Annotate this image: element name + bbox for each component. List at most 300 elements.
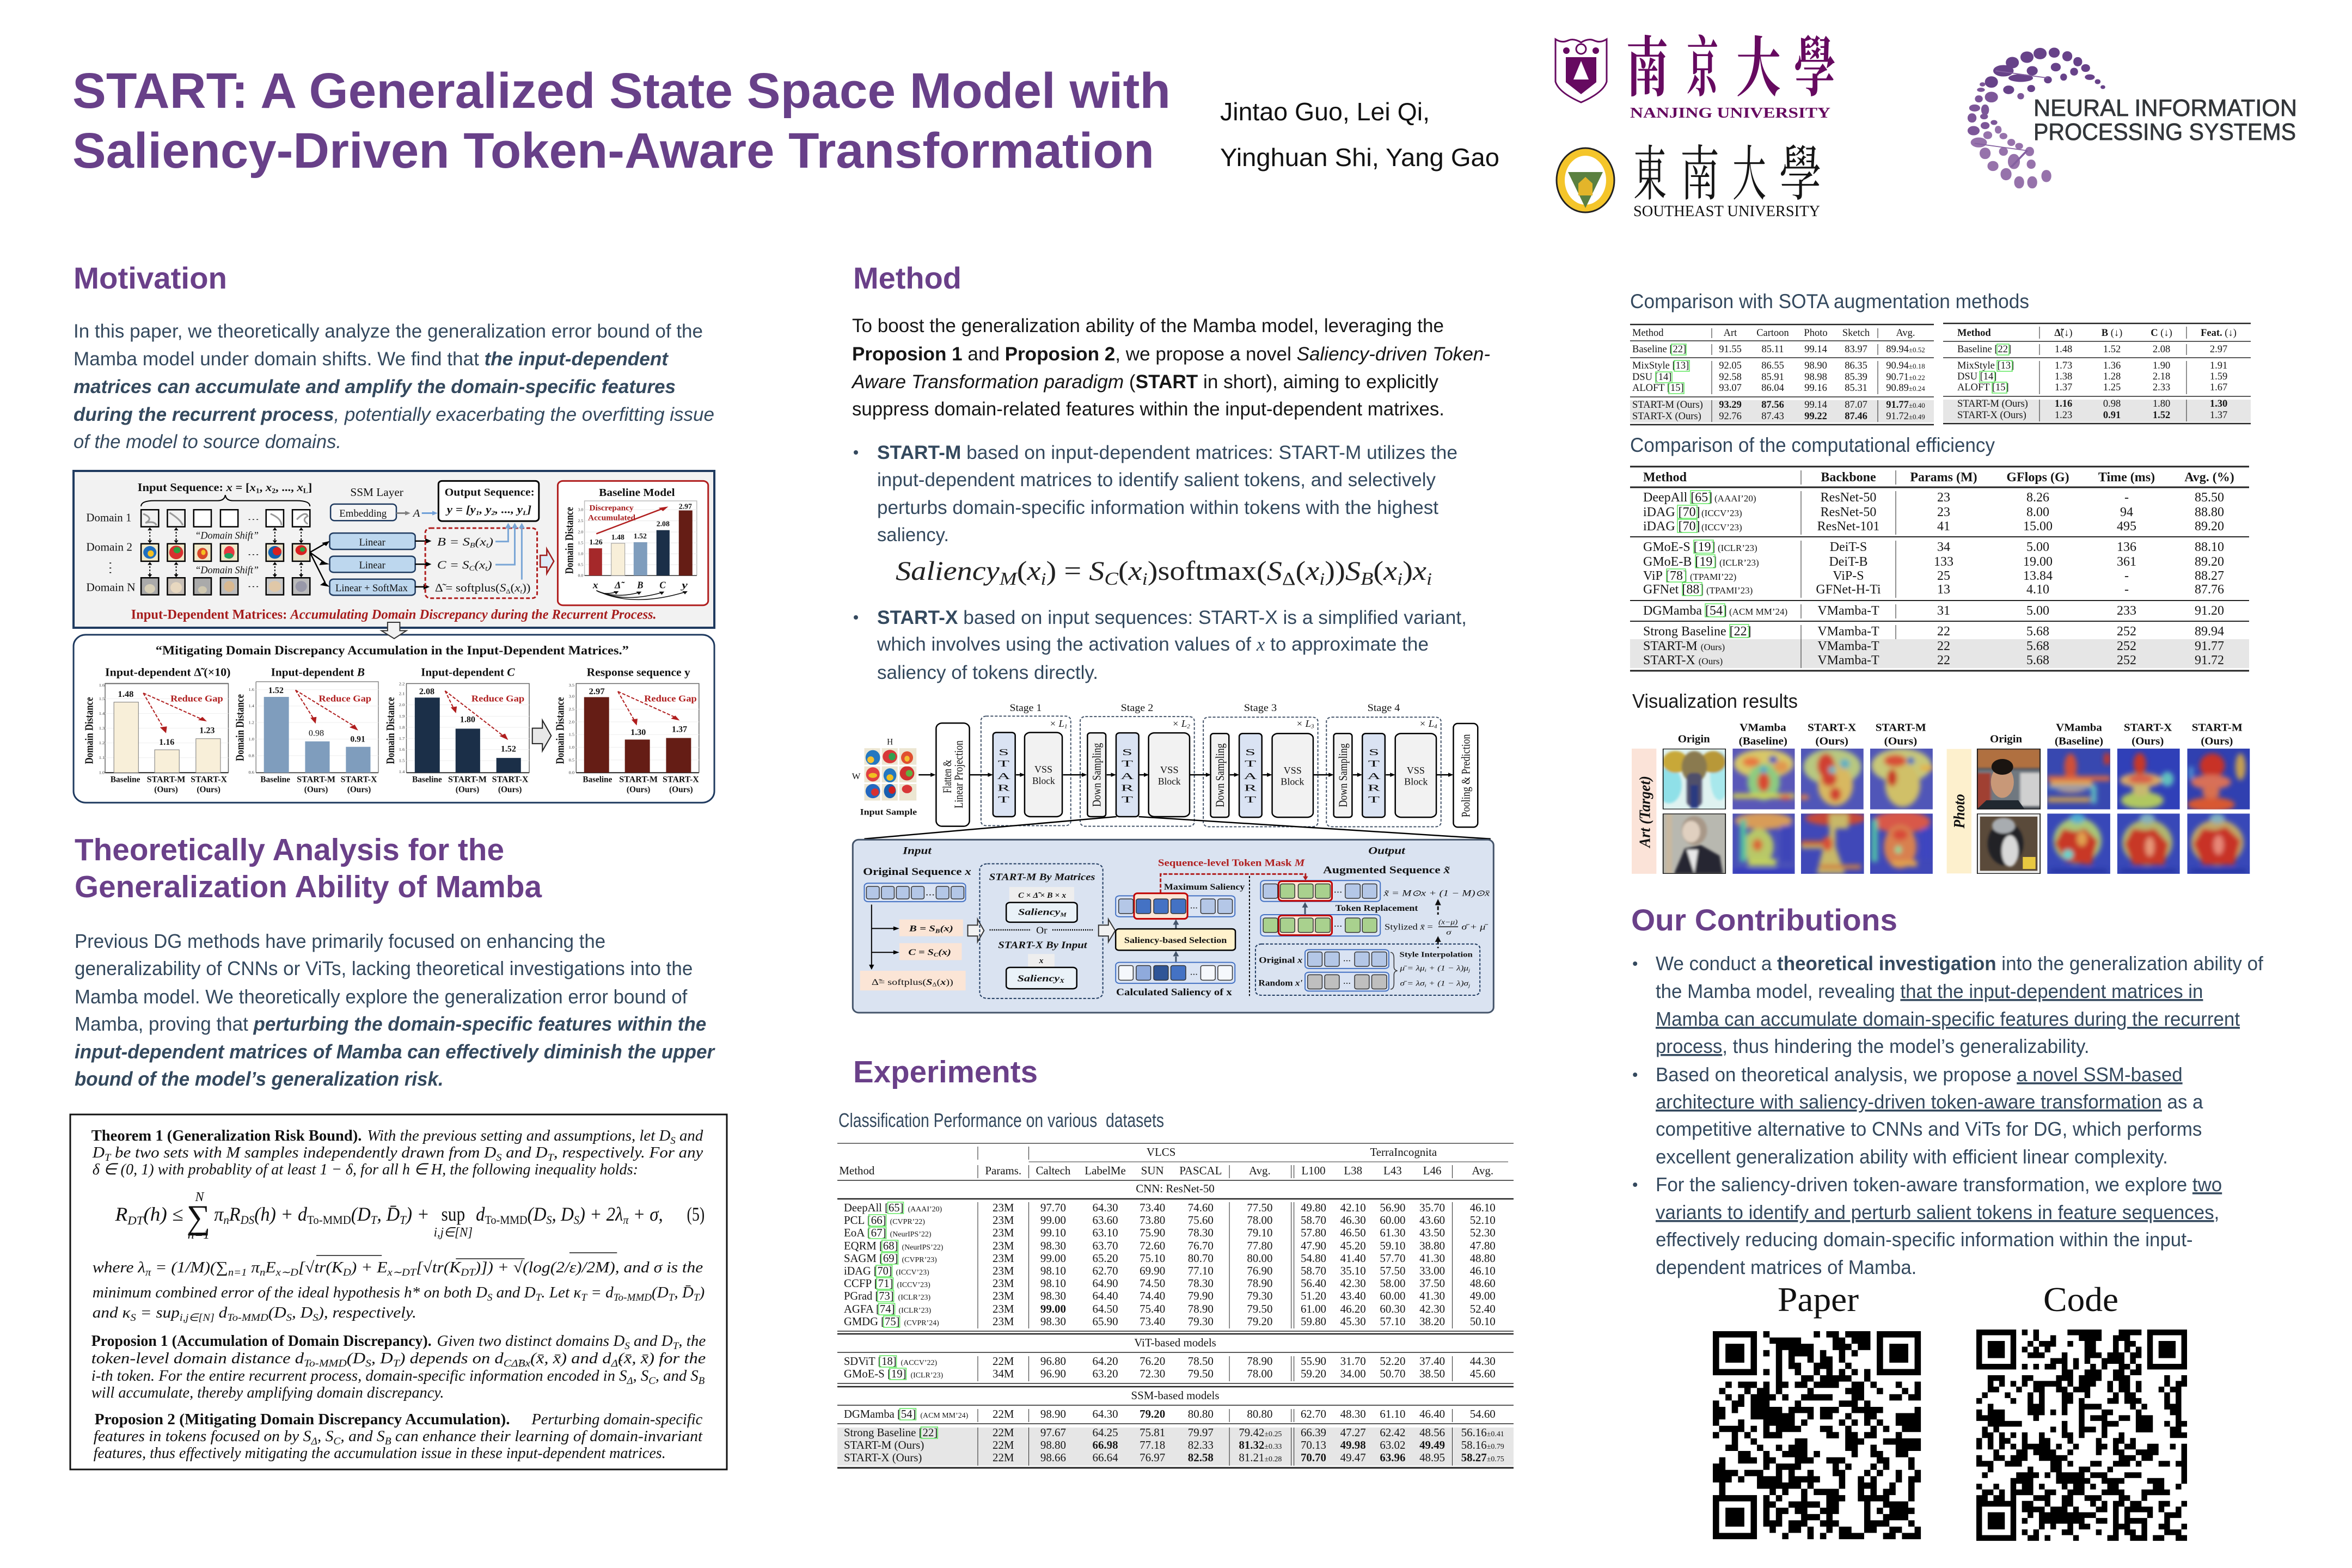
- table: SOTA comparison accuracy: 85.31: [1845, 383, 1867, 394]
- chart: response sequence y: 1.37: [672, 725, 687, 734]
- theorem 1: T: [548, 1152, 554, 1163]
- table: SOTA comparison distance: Baseline [22]: [1957, 344, 2011, 355]
- text block: theoretical analysis body: input-dependent matrices of Mamba can effectively diminish the upper: [75, 1040, 715, 1063]
- equation 5: [114, 1190, 705, 1242]
- logo: Southeast University: 大: [1732, 142, 1766, 208]
- formula: saliency M: C: [1104, 569, 1118, 589]
- chart: response sequence y: Baseline: [583, 775, 612, 785]
- style interpolation box: σ̄ = λσ: [1400, 979, 1440, 988]
- authors: Yinghuan Shi, Yang Gao: [1220, 143, 1499, 171]
- table: SOTA comparison accuracy: 90.89±0.24: [1886, 383, 1925, 394]
- method column: GMDG [75]: [844, 1315, 900, 1328]
- theorem 1: be two sets with M samples independently drawn from D: [111, 1144, 496, 1161]
- baseline model chart: 1.26: [589, 538, 603, 546]
- table: SOTA comparison accuracy: 98.98: [1804, 372, 1827, 383]
- table: SOTA comparison accuracy: 99.14: [1804, 344, 1827, 355]
- chart: input-dependent B: 1.4: [248, 704, 254, 708]
- input sample image: H: [887, 737, 893, 746]
- data rows: 79.30: [1188, 1315, 1214, 1328]
- stages pipeline: R: [1121, 783, 1134, 793]
- chart: response sequence y: Reduce Gap: [644, 693, 697, 703]
- table: SOTA comparison accuracy: 87.56: [1761, 400, 1784, 411]
- chart: input-dependent C: 2.08: [419, 687, 434, 696]
- method column: Strong Baseline [22]: [844, 1426, 938, 1439]
- table: computational efficiency: 361: [2117, 555, 2136, 569]
- data rows: 46.30: [1340, 1214, 1366, 1227]
- table: computational efficiency: 4.10: [2026, 583, 2049, 597]
- panel: input-dependent matrices: Output Sequence:: [445, 486, 535, 498]
- proposition 1: , S: [633, 1367, 648, 1385]
- text block: method intro: suppress domain-related features within the input-dependent matrixes.: [852, 399, 1444, 420]
- panel: START module detail: Maximum Saliency: [1164, 883, 1245, 892]
- VSS blocks: [1025, 732, 1436, 817]
- where clause: . Let κ: [541, 1284, 581, 1301]
- stages pipeline: S: [1369, 747, 1379, 757]
- text block: contributions: the Mamba model, revealing that the input-dependent matrices in: [1656, 981, 2203, 1002]
- data rows: 58.70: [1301, 1214, 1326, 1227]
- data rows: 78.90: [1188, 1302, 1214, 1315]
- panel: input-dependent matrices: y = [y: [447, 504, 495, 516]
- table: classification performance: L100: [1301, 1164, 1326, 1177]
- text block: theoretical analysis body: bound of the model’s generalization risk.: [75, 1068, 444, 1090]
- table: SOTA comparison distance: 1.23: [2055, 410, 2072, 421]
- proposition 1: C: [648, 1375, 656, 1387]
- data rows: 48.60: [1470, 1277, 1496, 1290]
- panel: START module detail: C = S: [908, 947, 950, 957]
- logo: NeurIPS: [1968, 48, 2297, 188]
- proposition 1: (x̄, x̄) and d: [530, 1350, 611, 1367]
- data rows: 23M: [993, 1226, 1014, 1239]
- calculated saliency sequence: [1116, 963, 1235, 997]
- data rows: 76.70: [1188, 1239, 1214, 1252]
- table: computational efficiency: 22: [1937, 639, 1950, 653]
- table: SOTA comparison distance: B: [2102, 328, 2108, 339]
- chart: input-dependent delta: START-X: [191, 775, 227, 785]
- table: SOTA comparison accuracy: 85.11: [1762, 344, 1784, 355]
- method column: START-M (Ours): [844, 1438, 924, 1451]
- proposition 2: Proposion 2 (Mitigating Domain Discrepancy Accumulation).: [95, 1411, 510, 1428]
- baseline model chart: 2.0: [578, 530, 583, 535]
- equation 5: n: [223, 1213, 229, 1227]
- heading: theoretical analysis: Theoretically Analysis for the: [75, 832, 504, 867]
- table: computational efficiency: Method: [1643, 470, 1687, 485]
- block: pooling and prediction: [1453, 724, 1478, 827]
- data rows: 64.30: [1093, 1407, 1118, 1420]
- data rows: 64.90: [1093, 1277, 1118, 1290]
- method column: DeepAll [65]: [844, 1201, 904, 1214]
- START-M and START-X options: M: [1059, 912, 1067, 918]
- data rows: 78.00: [1247, 1367, 1272, 1380]
- baseline model chart: 1.0: [578, 552, 583, 556]
- chart: input-dependent delta: 1.4: [99, 712, 105, 716]
- data rows: 65.20: [1093, 1252, 1118, 1265]
- table: computational efficiency: 91.20: [2195, 604, 2224, 618]
- where clause: = sup: [136, 1304, 180, 1321]
- saliency selection box: [1116, 929, 1235, 950]
- panel: input-dependent matrices: L: [303, 487, 308, 495]
- logo: Nanjing University: 學: [1793, 32, 1836, 105]
- theorem 1: and D: [501, 1144, 548, 1161]
- table: classification performance: Method: [839, 1164, 875, 1177]
- chart: response sequence y: 2.0: [569, 720, 574, 724]
- table: SOTA comparison distance: 1.90: [2153, 360, 2170, 371]
- chart: input-dependent B: (Ours): [304, 785, 328, 794]
- table: computational efficiency: VMamba-T: [1817, 639, 1879, 653]
- text block: theoretical analysis body: generalizability of CNNs or ViTs, lacking theoretical investigations into the: [75, 957, 693, 979]
- table: computational efficiency: ViP-S: [1833, 569, 1864, 583]
- proposition 1: ) depends on d: [398, 1350, 504, 1367]
- table: SOTA comparison distance: Δ̃: [2054, 328, 2065, 339]
- formula: saliency M: x: [1026, 555, 1040, 586]
- table: SOTA comparison distance: 1.67: [2210, 382, 2227, 393]
- stages pipeline: 1: [1064, 723, 1067, 730]
- where clause: d: [215, 1304, 228, 1321]
- table: SOTA comparison distance: (↓): [2108, 328, 2122, 339]
- stages pipeline: S: [999, 747, 1009, 757]
- panel: input-dependent matrices: x: [297, 481, 303, 494]
- data rows: 80.00: [1247, 1252, 1272, 1265]
- stages pipeline: Stage 1: [1009, 702, 1042, 713]
- table: computational efficiency: 22: [1937, 653, 1950, 667]
- chart: input-dependent delta: Baseline: [111, 775, 140, 785]
- data rows: 23M: [993, 1302, 1014, 1315]
- heading: Our Contributions: Our Contributions: [1631, 903, 1897, 937]
- heading: visualization results: Visualization results: [1632, 690, 1798, 712]
- panel: input-dependent matrices: (x: [475, 559, 485, 571]
- table: computational efficiency: 85.50: [2195, 491, 2224, 505]
- data rows: 73.40: [1140, 1201, 1165, 1214]
- panel: START module detail: (x): [938, 947, 951, 957]
- data rows: 38.20: [1419, 1315, 1445, 1328]
- equation 5: R: [115, 1203, 127, 1225]
- formula: saliency M: x: [1128, 555, 1142, 586]
- data rows: 23M: [993, 1315, 1014, 1328]
- panel: input-dependent matrices: Domain 2: [86, 541, 132, 553]
- chart: input-dependent C: 2.2: [399, 682, 405, 686]
- text block: method intro: Proposion 1 and Proposion 2, we propose a novel Saliency-driven Token-: [852, 344, 1490, 365]
- panel: START module detail: Sequence-level Token Mask M: [1158, 858, 1305, 868]
- table: computational efficiency: START-M (Ours): [1643, 639, 1725, 653]
- method column: (AAAI’20): [908, 1205, 942, 1214]
- equation 5: To-MMD: [485, 1213, 528, 1227]
- table: SOTA comparison distance: START-M (Ours): [1957, 399, 2028, 409]
- stylized sequence: [1260, 915, 1489, 936]
- panel: START module detail: ...: [926, 889, 935, 897]
- augmented sequence: x̃ = M⊙x + (1 − M)⊙x̄: [1383, 889, 1490, 898]
- equation 5: (h) + d: [254, 1203, 308, 1225]
- stages pipeline: T: [1368, 794, 1380, 805]
- data rows: [993, 1201, 1504, 1464]
- data rows: 82.58: [1188, 1451, 1214, 1464]
- stylized sequence: ...: [1334, 920, 1342, 929]
- style interpolation box: + (1 − λ)σ: [1426, 979, 1469, 988]
- data rows: 23M: [993, 1289, 1014, 1302]
- equation 5: ) + 2λ: [578, 1203, 623, 1225]
- data rows: 46.40: [1419, 1407, 1445, 1420]
- data rows: 51.20: [1301, 1289, 1326, 1302]
- panel: input-dependent matrices: 2: [491, 509, 495, 516]
- text block: START-X bullet: START-X based on input sequences: START-X is a simplified variant,: [877, 607, 1467, 628]
- heatmap: elephant START-X: [1801, 749, 1864, 810]
- chart: input-dependent C: 1.7: [399, 737, 405, 741]
- table: SOTA comparison accuracy: ALOFT [15]: [1632, 383, 1684, 394]
- table: computational efficiency: DeiT-B: [1829, 555, 1868, 569]
- equation 5: To-MMD: [307, 1213, 351, 1227]
- formula: saliency M: (: [1296, 555, 1306, 586]
- panel: START module detail: Augmented Sequence x̃: [1323, 864, 1450, 876]
- theorem 1: T: [105, 1152, 112, 1163]
- table: computational efficiency: (ICLR’23): [1719, 558, 1759, 568]
- title: START: A Generalized State Space Model with: [72, 63, 1171, 119]
- table: computational efficiency: 89.94: [2195, 624, 2224, 639]
- data rows: 23M: [993, 1214, 1014, 1227]
- data rows: 48.80: [1470, 1252, 1496, 1265]
- table: SOTA comparison accuracy: 99.22: [1804, 411, 1827, 422]
- data rows: 61.30: [1380, 1226, 1405, 1239]
- text block: contributions: Mamba can accumulate domain-specific features during the recurrent: [1656, 1008, 2240, 1030]
- theorem 1: S: [670, 1135, 676, 1147]
- data rows: 43.50: [1419, 1226, 1445, 1239]
- data rows: 98.30: [1040, 1239, 1066, 1252]
- table: computational efficiency: 5.68: [2026, 624, 2049, 639]
- formula: saliency M: Saliency: [896, 555, 1000, 586]
- theorem 1: δ ∈ (0, 1) with probablity of at least 1 − δ, for all h ∈ H, the following inequality holds:: [93, 1161, 638, 1178]
- chart: response sequence y: 2.5: [569, 707, 574, 712]
- data rows: 77.10: [1188, 1264, 1214, 1277]
- chart: input-dependent B: 0.91: [350, 734, 365, 744]
- table: classification performance: L38: [1344, 1164, 1362, 1177]
- formula: saliency M: i: [1426, 569, 1432, 589]
- panel: input-dependent matrices: t: [520, 588, 523, 595]
- formula: saliency M: )): [1325, 555, 1345, 586]
- stages pipeline: Down Sampling: [1091, 743, 1104, 807]
- data rows: 52.10: [1470, 1214, 1496, 1227]
- chart: input-dependent delta: 1.0: [99, 771, 105, 775]
- where clause: (D: [652, 1284, 669, 1301]
- formula: saliency M: i: [1319, 569, 1325, 589]
- data rows: 22M: [993, 1451, 1014, 1464]
- logo: Southeast University: 南: [1680, 142, 1719, 208]
- data rows: 79.50: [1247, 1302, 1272, 1315]
- chart: input-dependent delta: 1.6: [99, 683, 105, 688]
- data rows: 22M: [993, 1355, 1014, 1368]
- chart: input-dependent delta: 1.5: [99, 697, 105, 701]
- table: classification performance: L46: [1423, 1164, 1441, 1177]
- chart: input-dependent delta: Domain Distance: [83, 697, 96, 764]
- table: computational efficiency: 91.77: [2195, 639, 2224, 653]
- text block: contributions: Based on theoretical analysis, we propose a novel SSM-based: [1656, 1064, 2183, 1086]
- where clause: S: [313, 1312, 318, 1324]
- stages pipeline: VSS: [1034, 764, 1052, 775]
- heading: Motivation: Motivation: [74, 261, 227, 295]
- data rows: 97.70: [1040, 1201, 1066, 1214]
- baseline model chart: B: [637, 580, 644, 590]
- QR code: code: [1976, 1332, 2187, 1538]
- strip: Photo: [1947, 749, 1971, 873]
- data rows: 74.60: [1188, 1201, 1214, 1214]
- stages pipeline: × L: [1419, 719, 1448, 729]
- table: classification performance: Caltech: [1036, 1164, 1071, 1177]
- chart: response sequence y: START-M: [619, 775, 658, 785]
- column labels: START-X: [2124, 721, 2172, 733]
- table: SOTA comparison accuracy: 99.14: [1804, 400, 1827, 411]
- stages pipeline: A: [997, 771, 1010, 781]
- stages pipeline: A: [1367, 771, 1381, 781]
- column labels: (Ours): [1815, 735, 1848, 747]
- text block: contributions: [1633, 953, 2264, 1278]
- table: classification performance: ViT-based models: [1134, 1336, 1216, 1349]
- proposition 2: , S: [317, 1428, 333, 1445]
- baseline model chart: C: [659, 580, 666, 590]
- equation 5: , D: [552, 1203, 574, 1225]
- baseline model chart: 3.0: [578, 508, 583, 512]
- table: computational efficiency: GFNet-H-Ti: [1816, 583, 1881, 597]
- panel: START module detail: (: [936, 977, 940, 987]
- chart: input-dependent B: Domain Distance: [234, 694, 247, 761]
- image: dog origin: [1976, 813, 2041, 874]
- proposition 1: To-MMD: [304, 1358, 347, 1369]
- data rows: 59.80: [1301, 1315, 1326, 1328]
- chart: input-dependent B: 1.2: [248, 721, 254, 725]
- chart: input-dependent C: 1.80: [460, 715, 475, 724]
- panel: input-dependent matrices: “Domain Shift”: [195, 565, 259, 575]
- proposition 2: Perturbing domain-specific: [531, 1411, 702, 1428]
- text block: START-M bullet: saliency.: [877, 524, 949, 546]
- baseline model chart: Baseline Model: [599, 487, 675, 499]
- table: computational efficiency: iDAG [70]: [1643, 505, 1700, 519]
- table: computational efficiency: GMoE-B [19]: [1643, 555, 1717, 569]
- equation 5: T: [371, 1213, 378, 1227]
- panel: START module detail: x)): [940, 977, 958, 987]
- stages pipeline: VSS: [1160, 765, 1179, 775]
- text block: START-M bullet: START-M based on input-dependent matrices: START-M utilizes the: [877, 442, 1457, 463]
- heatmap: man START-M: [2187, 749, 2250, 810]
- column labels: START-X: [1808, 721, 1856, 733]
- chart: input-dependent delta: (Ours): [197, 785, 220, 794]
- table: computational efficiency: 133: [1934, 555, 1953, 569]
- data rows: 58.27±0.75: [1461, 1451, 1504, 1464]
- formula: saliency M: x: [1412, 555, 1426, 586]
- data rows: 72.60: [1140, 1239, 1165, 1252]
- chart: input-dependent C: (Ours): [498, 785, 522, 794]
- table: computational efficiency: Params (M): [1910, 470, 1977, 485]
- data rows: 73.80: [1140, 1214, 1165, 1227]
- saliency token sequence: [1116, 893, 1235, 919]
- data rows: 35.10: [1340, 1264, 1366, 1277]
- text block: contributions: excellent generalization ability with efficient linear complexity.: [1656, 1146, 2168, 1168]
- table: SOTA comparison distance: 0.98: [2103, 399, 2121, 409]
- data rows: 62.70: [1301, 1407, 1326, 1420]
- table: computational efficiency: (AAAI’20): [1714, 493, 1756, 504]
- panel: input-dependent matrices: , ...,: [275, 481, 297, 494]
- data rows: 49.47: [1340, 1451, 1366, 1464]
- data rows: 60.00: [1380, 1214, 1405, 1227]
- where clause: To-MMD: [227, 1312, 268, 1324]
- data rows: 97.67: [1040, 1426, 1066, 1439]
- stages pipeline: A: [1244, 771, 1257, 781]
- data rows: 57.70: [1380, 1252, 1405, 1265]
- text block: motivation body: of the model to source domains.: [74, 431, 341, 452]
- chart: response sequence y: 2.97: [589, 687, 605, 696]
- title: Saliency-Driven Token-Aware Transformation: [72, 123, 1154, 179]
- data rows: 72.30: [1140, 1367, 1165, 1380]
- table: computational efficiency: 5.68: [2026, 639, 2049, 653]
- equation 5: T: [400, 1213, 407, 1227]
- proposition 1: T: [393, 1358, 400, 1369]
- data rows: 98.80: [1040, 1438, 1066, 1451]
- logo: Nanjing University: [1555, 32, 1836, 121]
- panel: input-dependent matrices: B = S: [437, 535, 487, 548]
- proposition 1: will accumulate, thereby amplifying domain discrepancy.: [91, 1384, 444, 1401]
- data rows: 34.00: [1340, 1367, 1366, 1380]
- chart: input-dependent C: Domain Distance: [384, 697, 397, 764]
- data rows: 54.80: [1301, 1252, 1326, 1265]
- equation 5: + σ,: [628, 1203, 663, 1225]
- proposition 2: features in tokens focused on by S: [94, 1428, 305, 1445]
- data rows: 70.13: [1301, 1438, 1326, 1451]
- table: SOTA comparison distance: 2.08: [2153, 344, 2170, 355]
- data rows: 66.98: [1093, 1438, 1118, 1451]
- proposition 2: B: [385, 1436, 391, 1447]
- baseline model chart: Discrepancy: [589, 503, 634, 512]
- chart: response sequence y: Domain Distance: [554, 697, 567, 764]
- data rows: 58.16±0.79: [1461, 1438, 1504, 1451]
- figure: START architecture: [852, 702, 1493, 1013]
- method column: (ACM MM’24): [920, 1412, 969, 1420]
- data rows: 78.30: [1188, 1277, 1214, 1290]
- heatmap: portrait START-M: [1870, 813, 1933, 874]
- table: computational efficiency: 87.76: [2195, 583, 2224, 597]
- calculated saliency sequence: ...: [1190, 968, 1198, 977]
- chart: input-dependent B: 0.6: [248, 770, 254, 775]
- table: SOTA comparison accuracy: MixStyle [13]: [1632, 360, 1689, 371]
- panel: input-dependent matrices: (: [511, 581, 514, 594]
- style interpolation box: + (1 − λ)μ: [1426, 964, 1468, 972]
- data rows: 82.33: [1188, 1438, 1214, 1451]
- table: computational efficiency: 34: [1937, 540, 1950, 554]
- table: computational efficiency: START-X (Ours): [1643, 653, 1723, 667]
- baseline model chart: 0.5: [578, 563, 583, 567]
- baseline model chart: Domain Distance: [563, 507, 576, 574]
- stages pipeline: 2: [1187, 723, 1190, 730]
- table: computational efficiency: 15.00: [2023, 519, 2053, 534]
- data rows: 55.90: [1301, 1355, 1326, 1368]
- chart: input-dependent B: Baseline: [260, 775, 290, 785]
- authors: [1220, 97, 1499, 171]
- baseline model chart: [558, 481, 708, 605]
- QR code: paper: [1713, 1334, 1921, 1536]
- logo: NeurIPS: NEURAL INFORMATION: [2033, 95, 2297, 121]
- figure: visualization results: START-M: [2192, 721, 2243, 733]
- data rows: 37.50: [1419, 1277, 1445, 1290]
- style interpolation box: μ̄ = λμ: [1400, 964, 1440, 972]
- data rows: 79.97: [1188, 1426, 1214, 1439]
- panel: input-dependent matrices: C: [469, 565, 475, 572]
- chart: response sequence y: [554, 666, 699, 794]
- formula: saliency M: )softmax(: [1148, 555, 1267, 586]
- where clause: , D̄: [674, 1284, 694, 1301]
- domain tiles: [141, 510, 310, 595]
- table: computational efficiency: iDAG [70]: [1643, 519, 1700, 534]
- chart: input-dependent delta: Input-dependent Δ̃ (×10): [105, 666, 230, 678]
- method column: (ICLR’23): [899, 1307, 932, 1315]
- where clause: i,j∈[N]: [180, 1312, 215, 1324]
- stages pipeline: 4: [1434, 723, 1437, 730]
- title: [72, 63, 1171, 179]
- data rows: 81.21±0.28: [1239, 1451, 1282, 1464]
- chart: response sequence y: 1.0: [569, 745, 574, 750]
- table: SOTA comparison distance: MixStyle [13]: [1957, 360, 2014, 371]
